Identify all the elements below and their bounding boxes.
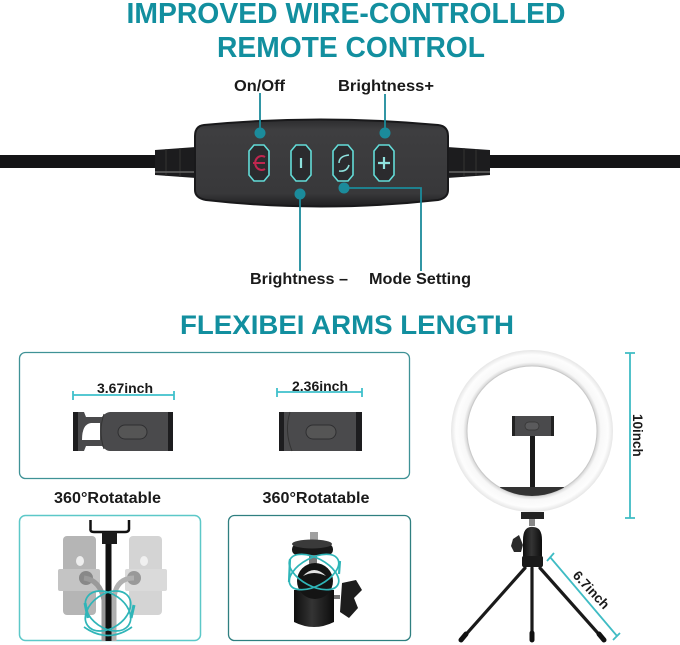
- panel: ball head: [228, 516, 410, 640]
- ring light: [451, 350, 613, 640]
- callout: On/Off: On/Off: [234, 78, 286, 95]
- callout: Mode Setting: [338, 182, 471, 288]
- ring base inside: [500, 487, 564, 497]
- cable: left: [0, 155, 160, 168]
- light ring: [451, 350, 613, 512]
- heading: arms length: FLEXIBEI ARMS LENGTH: [180, 310, 514, 340]
- ball head mount: [292, 532, 362, 627]
- remote body: [195, 120, 448, 206]
- dimension: 2.36inch: [277, 378, 362, 397]
- tripod legs: [461, 568, 604, 640]
- ball head: [511, 512, 544, 567]
- callout: Brightness+: Brightness+: [338, 78, 434, 95]
- remote control unit: [0, 120, 680, 206]
- title: REMOTE CONTROL: [217, 32, 485, 64]
- rotation arrows: [284, 547, 344, 597]
- button: minus: [291, 145, 311, 181]
- cable: right: [490, 155, 680, 168]
- callout: Mode Setting: Mode Setting: [369, 271, 471, 288]
- dimension: 6.7inch: [547, 553, 620, 640]
- ghost phones: [58, 536, 167, 641]
- button: plus: [374, 145, 394, 181]
- clamp rod: [530, 436, 535, 487]
- title: [126, 0, 566, 64]
- rotation arrows: [78, 583, 138, 639]
- strain relief: left: [155, 147, 196, 178]
- dimension: 3.67inch: 3.67inch: [97, 380, 153, 396]
- callout: On/Off: [234, 78, 286, 138]
- strain relief: right: [447, 147, 490, 178]
- dimension: 6.7inch: 6.7inch: [570, 568, 613, 612]
- panel: holder widths: [20, 352, 410, 478]
- center stand and clamp: [90, 520, 129, 641]
- label: 360 rotatable right: 360°Rotatable: [262, 490, 370, 507]
- dimension: 3.67inch: [73, 380, 174, 400]
- phone holder: closed: [279, 412, 362, 451]
- callout: Brightness-: [250, 188, 348, 288]
- callout: Brightness+: [338, 78, 434, 138]
- phone holder: extended: [73, 412, 173, 451]
- dimension: 10inch: [625, 353, 645, 518]
- phone clamp: [512, 416, 554, 436]
- button: power: [249, 145, 269, 181]
- button: mode: [333, 145, 353, 181]
- panel: rotating gooseneck: [20, 516, 200, 641]
- dimension: 10inch: 10inch: [630, 414, 645, 457]
- callout: Brightness-: Brightness –: [250, 271, 348, 288]
- dimension: 2.36inch: 2.36inch: [292, 378, 348, 394]
- label: 360 rotatable left: 360°Rotatable: [54, 490, 161, 507]
